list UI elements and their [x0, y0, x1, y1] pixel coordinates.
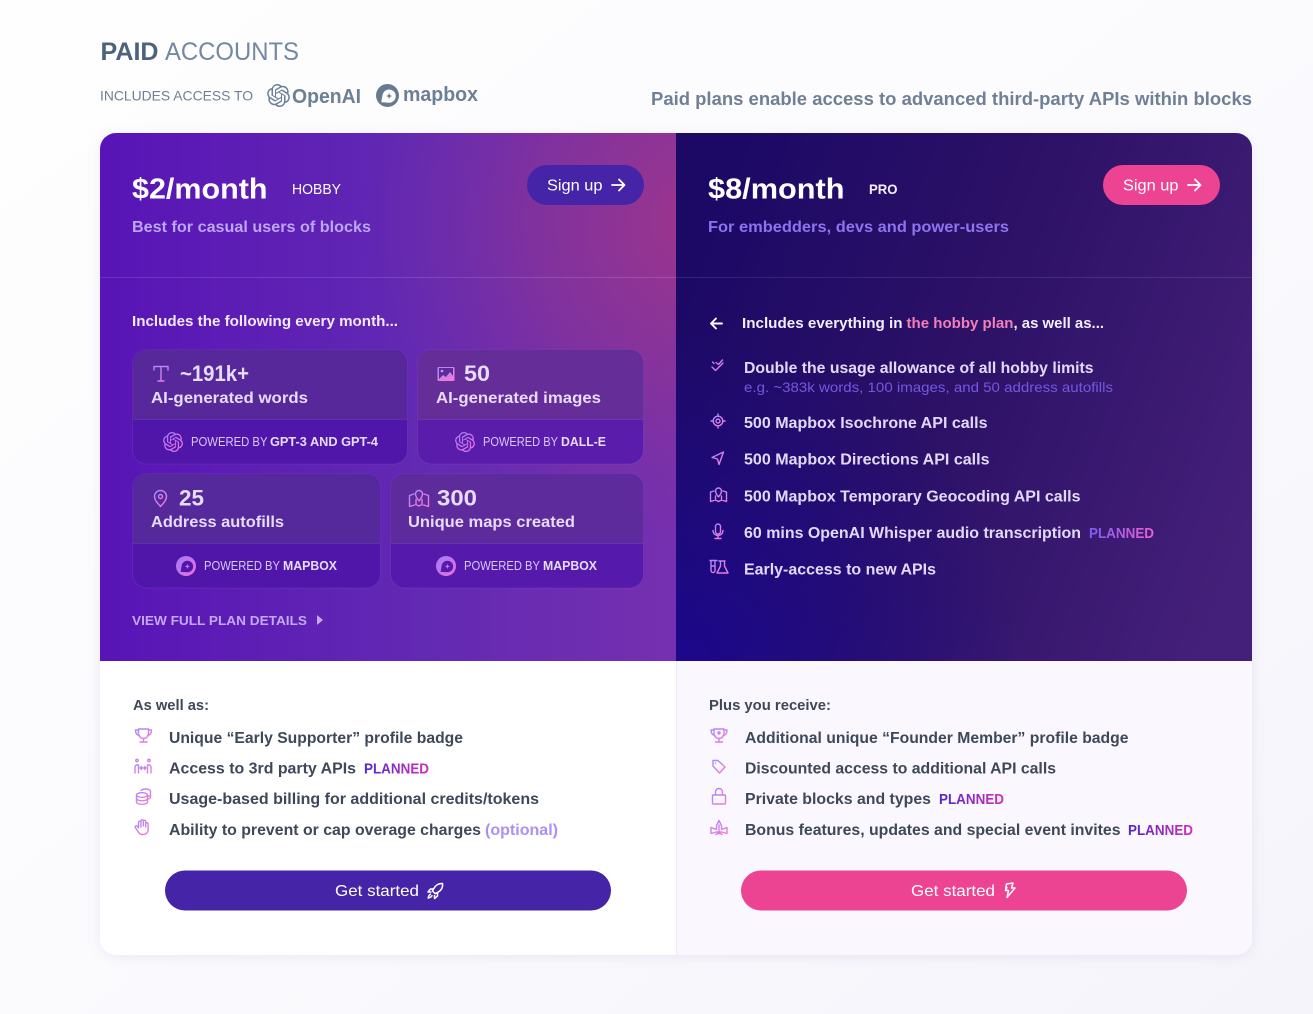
- card: AI-generated images: [418, 350, 644, 464]
- title: paid accounts: PAID: [100, 38, 158, 66]
- item: 3rd party APIs: PLANNED: [364, 762, 429, 778]
- item: overage cap: [135, 820, 558, 839]
- button: hobby sign up: Sign up: [547, 178, 603, 194]
- card: AI-generated words: GPT-3 AND GPT-4: [270, 435, 378, 449]
- card: address autofills: Address autofills: [151, 514, 284, 531]
- icon: openai logo: [455, 432, 475, 452]
- link: view full plan details: VIEW FULL PLAN DETAILS: [132, 613, 307, 628]
- pro includes heading: the hobby plan: [906, 315, 1014, 332]
- card: AI-generated images: POWERED BY: [483, 435, 559, 449]
- pricing card shadow: [100, 133, 1252, 955]
- card: unique maps: Unique maps created: [408, 514, 575, 531]
- item: whisper: 60 mins OpenAI Whisper audio transcription: [744, 525, 1081, 542]
- pro includes heading: , as well as...: [1014, 315, 1104, 332]
- icon: mapbox logo: [436, 556, 456, 576]
- card: unique maps: 300: [437, 486, 477, 510]
- icon: map: [410, 491, 428, 506]
- link: view full plan details: [132, 615, 323, 625]
- hobby price: $2/month: [132, 174, 268, 206]
- card: address autofills: MAPBOX: [283, 559, 338, 573]
- card: AI-generated images: 50: [464, 361, 490, 386]
- panel: hobby plan: [100, 133, 676, 661]
- item: whisper: PLANNED: [1089, 526, 1154, 542]
- item: directions: 500 Mapbox Directions API calls: [744, 452, 990, 468]
- card: AI-generated words: AI-generated words: [151, 390, 308, 407]
- panel: hobby extras: [133, 699, 611, 910]
- includes access to logos: INCLUDES ACCESS TO: [100, 88, 253, 104]
- hobby tagline: Best for casual users of blocks: [132, 219, 371, 236]
- includes access to logos: mapbox: [403, 84, 478, 106]
- pro includes heading: Includes everything in: [742, 315, 902, 332]
- button: pro get started: Get started: [911, 883, 995, 900]
- pro tagline: For embedders, devs and power-users: [708, 219, 1009, 236]
- item: private blocks: PLANNED: [939, 792, 1004, 808]
- item: overage cap: Ability to prevent or cap overage charges: [169, 822, 481, 839]
- item: overage cap: (optional): [485, 822, 558, 839]
- icon: pin: [154, 490, 166, 506]
- item: double usage: e.g. ~383k words, 100 images, and 50 address autofills: [744, 379, 1113, 395]
- card: address autofills: 25: [179, 486, 204, 510]
- button: hobby get started: [165, 870, 611, 910]
- icon: text: [154, 366, 168, 381]
- panel: pro extras: [676, 661, 1192, 955]
- card: address autofills: [132, 474, 380, 588]
- item: discounted access: Discounted access to additional API calls: [745, 760, 1056, 778]
- icon: image: [438, 367, 454, 381]
- card: unique maps: POWERED BY: [464, 559, 541, 573]
- card: AI-generated words: ~191k+: [180, 361, 249, 386]
- item: private blocks: Private blocks and types: [745, 791, 931, 808]
- extras heading: As well as:: [133, 697, 209, 714]
- title: paid accounts: [100, 38, 299, 66]
- item: geocoding: 500 Mapbox Temporary Geocoding API calls: [744, 488, 1081, 506]
- hobby label: HOBBY: [292, 182, 341, 198]
- item: private blocks: [712, 788, 1004, 808]
- icon: openai logo: [163, 432, 183, 452]
- button: hobby sign up: [527, 165, 644, 205]
- pro label: PRO: [869, 181, 898, 197]
- card: address autofills: POWERED BY: [204, 559, 281, 573]
- icon: mapbox logo: [176, 556, 196, 576]
- includes access to logos: [100, 84, 478, 108]
- card: unique maps: [390, 474, 644, 588]
- item: double usage: Double the usage allowance of all hobby limits: [744, 360, 1094, 377]
- button: pro get started: [741, 870, 1187, 910]
- item: bonus features: Bonus features, updates and special event invites: [745, 822, 1121, 839]
- item: 3rd party APIs: Access to 3rd party APIs: [169, 760, 356, 778]
- card: AI-generated images: AI-generated images: [436, 390, 601, 407]
- item: early supporter badge: Unique “Early Supporter” profile badge: [169, 730, 463, 747]
- item: usage billing: Usage-based billing for additional credits/tokens: [169, 791, 539, 808]
- includes access to logos: OpenAI: [292, 86, 361, 108]
- pro price: $8/month: [708, 174, 844, 206]
- arrow: back to hobby plan: [711, 318, 722, 328]
- card: AI-generated words: [132, 350, 408, 464]
- button: pro sign up: [1103, 165, 1220, 205]
- pro includes heading: [743, 317, 1103, 331]
- panel: pro plan: [676, 133, 1252, 661]
- button: pro sign up: Sign up: [1123, 178, 1179, 194]
- item: 3rd party APIs: [135, 759, 429, 778]
- button: hobby get started: Get started: [335, 883, 419, 900]
- card: AI-generated images: DALL-E: [561, 435, 606, 449]
- item: bonus features: PLANNED: [1128, 823, 1193, 839]
- hobby includes heading: Includes the following every month...: [132, 313, 398, 330]
- item: founder badge: Additional unique “Founder Member” profile badge: [745, 730, 1129, 747]
- item: double usage: [712, 360, 1113, 395]
- title: paid accounts: ACCOUNTS: [165, 38, 299, 66]
- item: early access: Early-access to new APIs: [744, 562, 936, 578]
- item: isochrone: 500 Mapbox Isochrone API calls: [744, 415, 988, 432]
- subtitle: Paid plans enable access to advanced third-party APIs within blocks: [651, 89, 1252, 109]
- card: unique maps: MAPBOX: [543, 559, 598, 573]
- extras heading: Plus you receive:: [709, 697, 831, 714]
- card: AI-generated words: POWERED BY: [191, 435, 268, 449]
